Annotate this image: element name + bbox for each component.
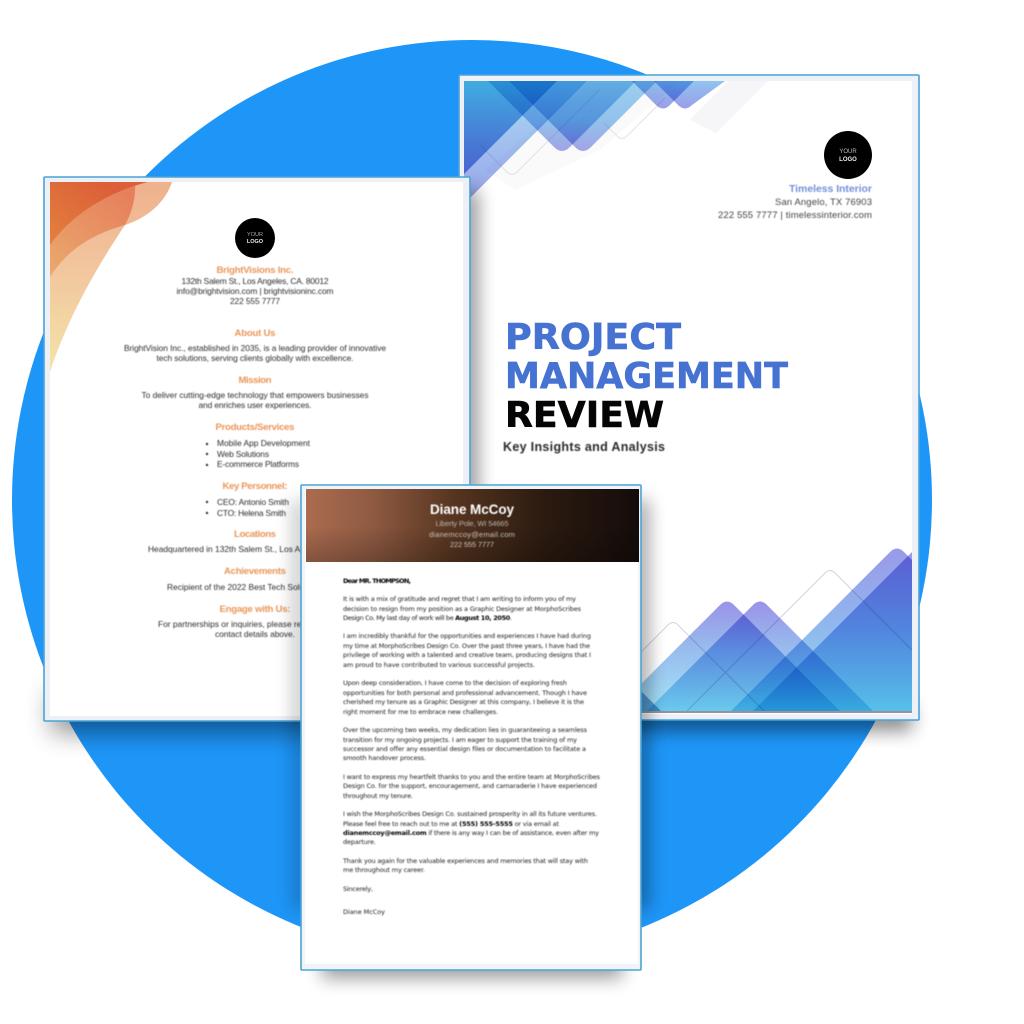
- company profile text: BrightVision Inc., established in 2035, is a leading provider of innovative: [124, 343, 386, 353]
- logo: [824, 131, 872, 179]
- letter header: dianemccoy@email.com: [429, 530, 515, 539]
- letter body: dianemccoy@email.com if there is any way I can be of assistance, even after my: [343, 829, 599, 837]
- cover title: MANAGEMENT: [505, 356, 788, 397]
- letter header: Diane McCoy: [430, 502, 514, 517]
- company profile text: Products/Services: [216, 422, 294, 433]
- company profile text: info@brightvision.com | brightvisioninc.com: [176, 286, 334, 296]
- cover title: PROJECT: [505, 317, 681, 358]
- letter body: I am incredibly thankful for the opportunities and experiences I have had during: [343, 632, 591, 640]
- letter header: [306, 489, 639, 562]
- company profile text: Web Solutions: [217, 449, 269, 459]
- letter body: Dear MR. THOMPSON,: [343, 577, 411, 585]
- letter body: Over the upcoming two weeks, my dedication lies in guaranteeing a seamless: [343, 726, 588, 734]
- letter body: am proud to have contributed to various successful projects.: [343, 661, 535, 669]
- cover subtitle: Key Insights and Analysis: [503, 440, 665, 454]
- letter body: my time at MorphoScribes Design Co. Over the past three years, I have had the: [343, 642, 590, 650]
- letter body: I want to express my heartfelt thanks to you and the entire team at MorphoScribes: [343, 773, 601, 781]
- letter body: throughout my tenure.: [343, 792, 413, 800]
- panel: resignation letter: [294, 485, 648, 978]
- letter body: [342, 577, 601, 916]
- letter body: right moment for me to embrace new challenges.: [343, 708, 498, 716]
- company profile text: Mission: [238, 375, 272, 386]
- company details: Timeless Interior: [789, 183, 872, 195]
- company profile text: 132th Salem St., Los Angeles, CA. 80012: [182, 276, 329, 286]
- letter body: It is with a mix of gratitude and regret that I am writing to inform you of my: [343, 595, 576, 603]
- company profile text: BrightVisions Inc.: [216, 265, 294, 276]
- company profile text: Locations: [234, 529, 276, 540]
- orange corner decoration: [50, 182, 172, 372]
- company details: San Angelo, TX 76903: [775, 197, 872, 208]
- company profile text: CEO: Antonio Smith: [217, 497, 289, 507]
- letter body: cherished my tenure as a Graphic Designer at this company, I believe it is the: [343, 698, 584, 706]
- letter header: Liberty Pole, WI 54665: [436, 519, 508, 528]
- company profile text: About Us: [234, 328, 276, 339]
- letter body: Please feel free to reach out to me at (555) 555-5555 or via email at: [343, 820, 559, 828]
- letter body: successor and offer any essential design files or documentation to facilitate a: [343, 745, 586, 753]
- letter body: Design Co. for the support, encouragement, and camaraderie I have experienced: [343, 782, 597, 790]
- company profile text: To deliver cutting-edge technology that empowers businesses: [142, 390, 368, 400]
- company profile text: Mobile App Development: [217, 438, 311, 448]
- cover title: REVIEW: [505, 395, 664, 436]
- panel: company profile: [44, 177, 478, 732]
- logo: LOGO: [247, 239, 264, 245]
- letter body: Design Co. My last day of work will be August 10, 2050.: [343, 614, 512, 622]
- company profile text: Engage with Us:: [220, 604, 290, 615]
- company profile text: 222 555 7777: [230, 296, 280, 306]
- letter body: me throughout my career.: [343, 866, 425, 874]
- company profile text: and enriches user experiences.: [198, 400, 312, 410]
- panel: project management review cover: [459, 75, 919, 731]
- letter body: departure.: [343, 838, 376, 846]
- letter body: opportunities for both personal and professional advancement. Though I have: [343, 689, 587, 697]
- company details: [718, 183, 872, 221]
- letter body: Upon deep consideration, I have come to the decision of exploring fresh: [343, 679, 567, 687]
- letter body: Diane McCoy: [343, 908, 385, 916]
- company profile text: For partnerships or inquiries, please reach out using the: [158, 619, 366, 629]
- bottom geometric decoration: [642, 548, 912, 711]
- logo: [235, 218, 275, 258]
- letter body: Thank you again for the valuable experiences and memories that will stay with: [342, 857, 588, 865]
- company profile text: [124, 265, 386, 639]
- letter body: I wish the MorphoScribes Design Co. sustained prosperity in all its future ventures.: [343, 810, 597, 818]
- company profile text: Key Personnel:: [222, 481, 288, 492]
- logo: YOUR: [839, 149, 857, 155]
- company profile text: E-commerce Platforms: [217, 459, 299, 469]
- company profile text: Recipient of the 2022 Best Tech Solutions Award: [167, 582, 348, 592]
- letter body: privilege of working with a talented and creative team, producing designs that I: [343, 651, 591, 659]
- letter body: smooth handover process.: [343, 754, 426, 762]
- company details: 222 555 7777 | timelessinterior.com: [718, 210, 872, 221]
- letter body: transition for my ongoing projects. I am eager to support the training of my: [343, 736, 577, 744]
- cover title: [505, 317, 788, 436]
- company profile text: Headquartered in 132th Salem St., Los Angeles, CA.: [148, 544, 344, 554]
- logo: YOUR: [247, 232, 263, 238]
- company profile text: CTO: Helena Smith: [217, 508, 286, 518]
- logo: LOGO: [839, 157, 857, 163]
- letter header: 222 555 7777: [450, 540, 494, 549]
- company profile text: tech solutions, serving clients globally with excellence.: [156, 353, 354, 363]
- letter body: decision to resign from my position as a Graphic Designer at MorphoScribes: [343, 605, 582, 613]
- top geometric decoration: [464, 81, 768, 204]
- company profile text: Achievements: [224, 566, 286, 577]
- company profile text: contact details above.: [215, 629, 295, 639]
- letter body: Sincerely,: [343, 885, 373, 893]
